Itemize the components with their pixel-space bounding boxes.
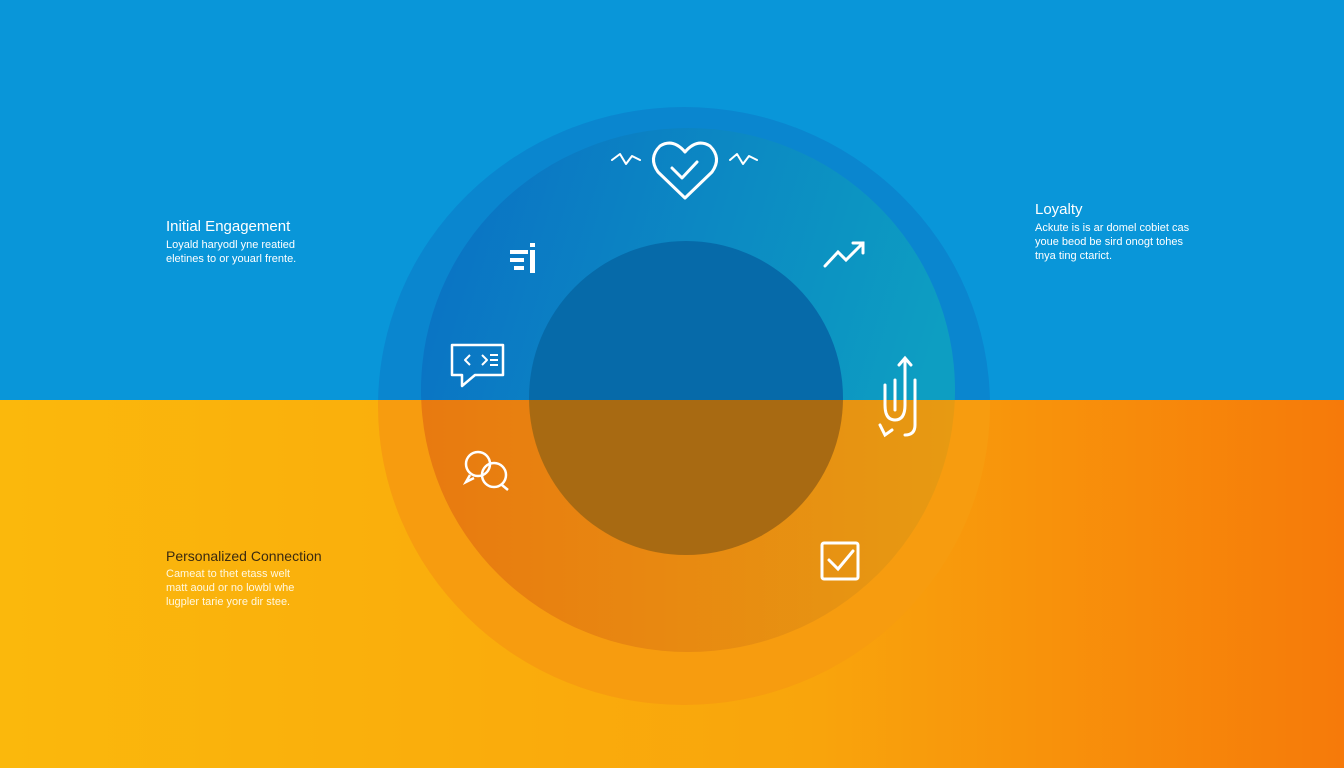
- icon: chat: [452, 345, 503, 386]
- icon: heart with pulse: [612, 143, 757, 198]
- text: Personalized Connection: lugpler tarie yore dir stee.: [166, 596, 290, 608]
- inner circle: [529, 241, 843, 555]
- middle ring: [421, 128, 955, 652]
- text: Loyalty: youe beod be sird onogt tohes: [1035, 236, 1183, 248]
- text: Initial Engagement: Loyald haryodl yne reatied: [166, 239, 295, 251]
- text: Personalized Connection: Personalized Connection: [166, 548, 322, 564]
- text: Loyalty: tnya ting ctarict.: [1035, 250, 1112, 262]
- icon: speech bubbles: [466, 452, 508, 490]
- text: Personalized Connection: [166, 548, 322, 608]
- icon: bars: [510, 243, 535, 273]
- text: Loyalty: Loyalty: [1035, 201, 1083, 218]
- icon: refresh arrows: [880, 358, 915, 435]
- text: Initial Engagement: Initial Engagement: [166, 218, 290, 235]
- icon: trend arrow: [825, 243, 863, 266]
- text: Initial Engagement: [166, 218, 296, 265]
- text: Initial Engagement: eletines to or youarl frente.: [166, 253, 296, 265]
- outer ring: [378, 107, 990, 705]
- icon: checkbox: [822, 543, 858, 579]
- text: Personalized Connection: Cameat to thet etass welt: [166, 568, 290, 580]
- text: Loyalty: [1035, 201, 1189, 262]
- text: Loyalty: Ackute is is ar domel cobiet cas: [1035, 222, 1189, 234]
- text: Personalized Connection: matt aoud or no lowbl whe: [166, 582, 294, 594]
